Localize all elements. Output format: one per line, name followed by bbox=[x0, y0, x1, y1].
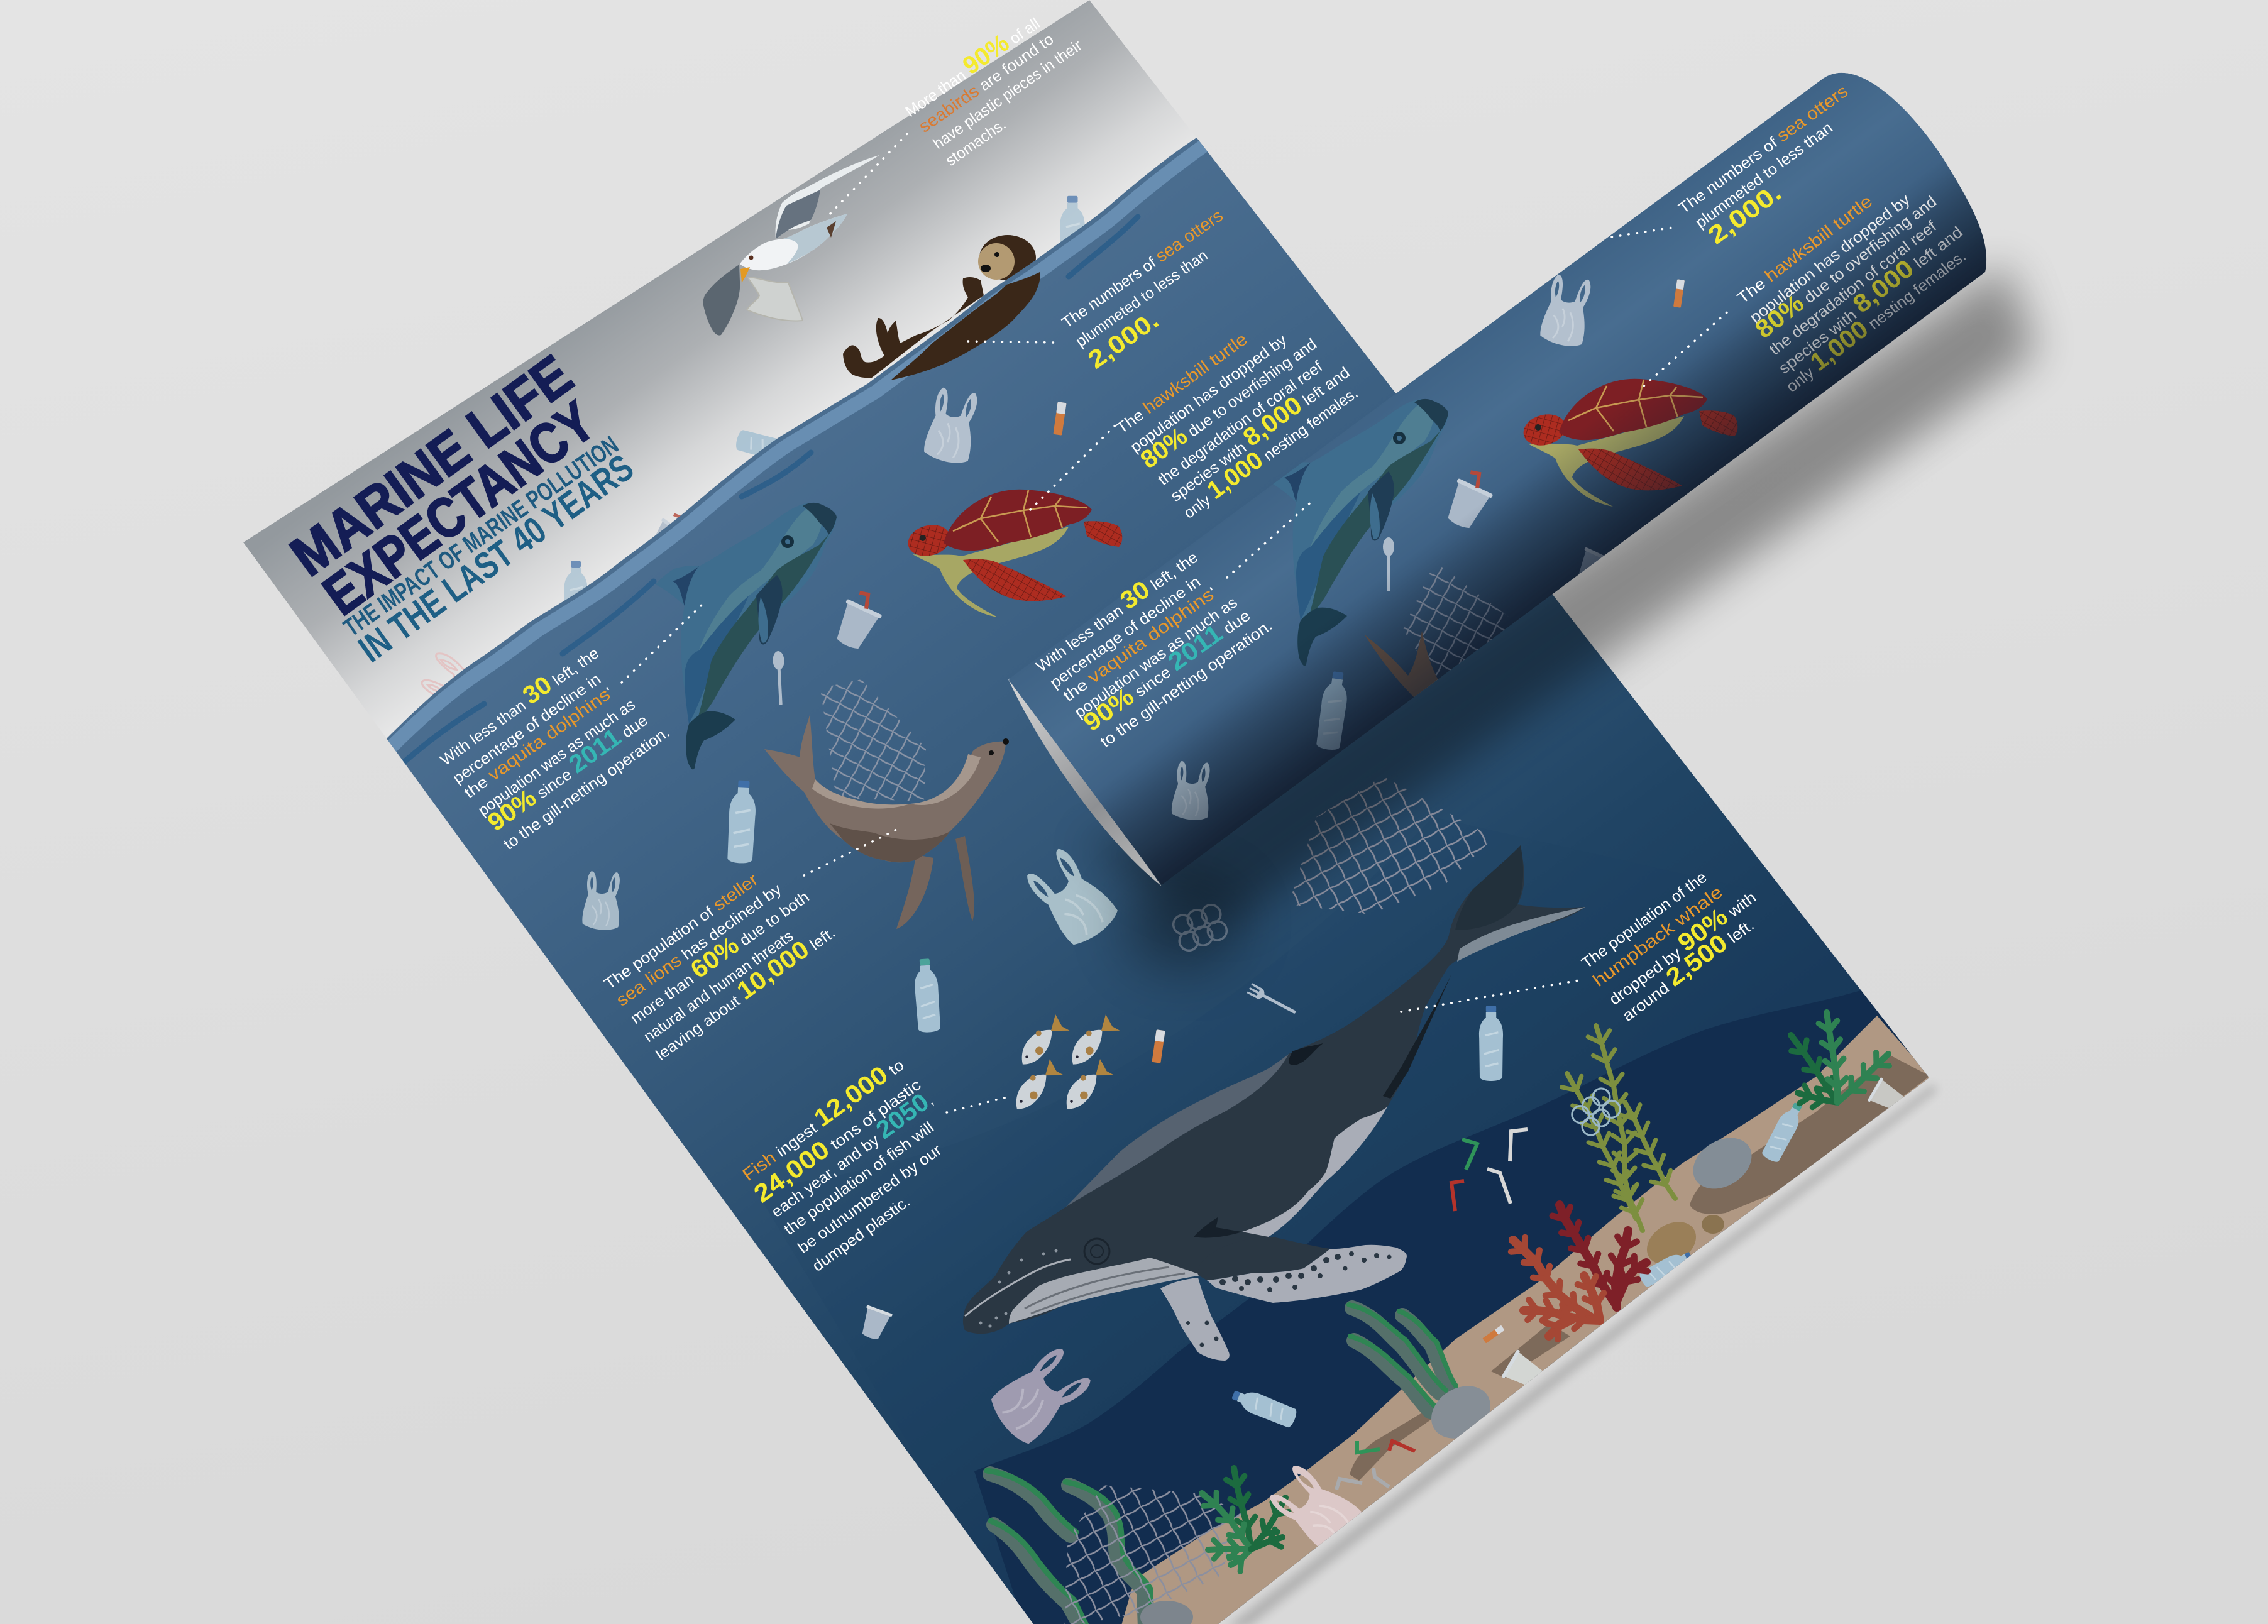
roll vaquita caption: the vaquita dolphins ' bbox=[1059, 583, 1220, 705]
hawksbill caption: The hawksbill turtle bbox=[1112, 329, 1251, 437]
hawksbill caption: species with 8,000 left and bbox=[1162, 357, 1354, 507]
seabirds caption: have plastic pieces in their bbox=[930, 36, 1085, 153]
fish caption: dumped plastic. bbox=[809, 1192, 913, 1275]
icon: bottle bbox=[1479, 1006, 1503, 1081]
title line 2: EXPECTANCY bbox=[312, 390, 606, 627]
icon: crushed bottle bbox=[1230, 1385, 1299, 1429]
vaquita caption: 90% since 2011 due bbox=[483, 705, 652, 837]
vaquita caption: With less than 30 left, the bbox=[432, 638, 603, 771]
icon: bottle at surface bbox=[564, 561, 587, 601]
roll vaquita caption: to the gill-netting operation. bbox=[1097, 617, 1275, 751]
seabird bbox=[703, 155, 879, 336]
roll turtle bbox=[1520, 379, 1737, 507]
icon: bag at surface left bbox=[417, 647, 504, 724]
roll bottle bbox=[1315, 671, 1351, 751]
steller sea lions caption bbox=[600, 870, 840, 1065]
roll hawksbill caption: 80% due to overfishing and bbox=[1750, 186, 1941, 344]
roll vaquita caption bbox=[1028, 542, 1275, 751]
pectoral fin bbox=[1198, 1237, 1330, 1280]
icon: fork bbox=[1247, 983, 1298, 1018]
steller sea lions caption: leaving about 10,000 left. bbox=[648, 917, 840, 1065]
icon: pink bag on seaweed bbox=[1264, 1459, 1367, 1558]
seabed cup bbox=[1867, 1077, 1907, 1116]
steller sea lions caption: natural and human threats bbox=[641, 927, 796, 1046]
sand shadows bbox=[1350, 1054, 1930, 1481]
seabirds caption: stomachs. bbox=[942, 116, 1010, 170]
seaweed: green bush bbox=[1202, 1468, 1285, 1565]
icon: bottle with teal cap bbox=[913, 958, 941, 1033]
sea otters caption: 2,000. bbox=[1083, 306, 1164, 374]
steller sea lions caption: more than 60% due to both bbox=[623, 881, 813, 1029]
steller sea lions caption: The population of steller bbox=[600, 870, 762, 993]
icon: cigarette butt bbox=[1053, 402, 1067, 436]
hawksbill caption: only 1,000 nesting females. bbox=[1175, 378, 1362, 524]
vaquita caption: population was as much as bbox=[475, 696, 639, 820]
seabirds caption: seabirds are found to bbox=[915, 29, 1057, 136]
second fin bbox=[1160, 1278, 1230, 1361]
roll cup lower bbox=[1571, 547, 1614, 592]
icon: bag at surface right bbox=[1125, 168, 1201, 230]
roll sea otters caption: plummeted to less than bbox=[1692, 119, 1836, 232]
roll cup bbox=[1440, 466, 1499, 533]
roll inner flap bbox=[1008, 679, 1162, 886]
roll hawksbill caption: The hawksbill turtle bbox=[1733, 191, 1876, 307]
sea otter upper body bbox=[843, 235, 1036, 378]
deepest water band bbox=[974, 990, 1949, 1624]
icon: plastic bag bbox=[922, 385, 983, 466]
whale belly patch bbox=[1242, 1107, 1387, 1237]
vaquita caption: the vaquita dolphins ' bbox=[460, 683, 617, 802]
fish caption: be outnumbered by our bbox=[795, 1141, 945, 1257]
poster bottom-edge shadow bbox=[1226, 1084, 1937, 1624]
panel: poster sheet bbox=[243, 0, 1949, 1624]
roll dolphin bbox=[1267, 399, 1448, 666]
fish caption bbox=[735, 1050, 945, 1275]
roll vaquita caption: percentage of decline in bbox=[1047, 573, 1204, 692]
rock brown bbox=[1639, 1213, 1704, 1273]
roll hawksbill caption: population has dropped by bbox=[1746, 190, 1913, 327]
seabed cigarette bbox=[1482, 1325, 1505, 1343]
roll leader lines bbox=[1227, 228, 1731, 578]
sea floor sand bbox=[1119, 1016, 1933, 1624]
icon: seabed bottle bbox=[1760, 1100, 1807, 1164]
icon: plastic bag bbox=[1020, 843, 1122, 951]
roll sea otters caption: 2,000. bbox=[1703, 178, 1786, 250]
vaquita dolphin bbox=[656, 503, 837, 769]
roll spoon bbox=[1383, 537, 1394, 591]
whale throat pleats bbox=[1009, 1258, 1203, 1324]
subtitle line 2: IN THE LAST 40 YEARS bbox=[351, 446, 641, 671]
roll hawksbill caption: only 1,000 nesting females. bbox=[1778, 241, 1971, 397]
sky gradient bbox=[243, 0, 1176, 738]
vaquita caption: to the gill-netting operation. bbox=[500, 723, 673, 853]
seabed crushed bottle bbox=[1638, 1248, 1695, 1289]
humpback caption bbox=[1578, 869, 1761, 1026]
hawksbill caption bbox=[1112, 329, 1362, 524]
seaweed: green plant right bbox=[1791, 1012, 1888, 1102]
seabirds caption bbox=[898, 8, 1085, 170]
hawksbill caption: the degradation of coral reef bbox=[1155, 358, 1326, 489]
humpback caption: around 2,500 left. bbox=[1614, 909, 1759, 1026]
panel: rolled poster bbox=[973, 73, 1986, 885]
seabed cup bbox=[1501, 1349, 1548, 1395]
rock grey bbox=[1421, 1375, 1500, 1449]
humpback caption: humpback whale bbox=[1589, 882, 1726, 990]
vaquita caption: percentage of decline in bbox=[449, 670, 604, 787]
roll sea lion flipper bbox=[1365, 631, 1446, 698]
steller sea lions caption: sea lions has declined by bbox=[612, 879, 785, 1010]
fish caption: the population of fish will bbox=[781, 1119, 937, 1239]
icon: six-pack rings bbox=[1170, 902, 1230, 953]
icon: plastic bag bbox=[581, 870, 623, 931]
subtitle line 1: THE IMPACT OF MARINE POLLUTION bbox=[339, 431, 624, 642]
roll cup left bbox=[973, 657, 1016, 703]
roll sea otters caption: The numbers of sea otters bbox=[1674, 81, 1851, 217]
seabirds caption: More than 90% of all bbox=[898, 8, 1044, 122]
hawksbill caption: 80% due to overfishing and bbox=[1135, 329, 1321, 474]
icon: cigarette butt bbox=[1152, 1029, 1165, 1063]
icon: cup at surface bbox=[642, 509, 695, 565]
roll vaquita caption: 90% since 2011 due bbox=[1079, 600, 1255, 737]
roll vaquita caption: population was as much as bbox=[1071, 593, 1241, 721]
hawksbill caption: population has dropped by bbox=[1127, 331, 1291, 456]
rock bottom bbox=[1140, 1601, 1193, 1624]
six-pack rings on kelp bbox=[1568, 1085, 1624, 1139]
sea lion bbox=[764, 715, 1009, 929]
net bbox=[1289, 776, 1494, 914]
seaweed: olive kelp bbox=[1567, 1026, 1675, 1231]
icon: crumpled bottle bbox=[727, 780, 757, 864]
icon: straws bbox=[1336, 1129, 1528, 1490]
net behind sea lion bbox=[820, 679, 926, 801]
wave crest bbox=[387, 146, 1204, 764]
roll net bbox=[1403, 562, 1519, 698]
humpback caption: dropped by 90% with bbox=[1601, 882, 1761, 1010]
rock bbox=[1684, 1127, 1761, 1199]
roll cylinder shading bbox=[1008, 73, 1986, 885]
sea otters caption: The numbers of sea otters bbox=[1058, 206, 1226, 332]
fold tip shadow bbox=[1125, 880, 1238, 968]
vaquita caption bbox=[432, 638, 673, 853]
roll bottle tilted bbox=[1499, 634, 1566, 683]
roll plastic bag bbox=[1538, 272, 1595, 349]
icon: bottle at surface bbox=[1060, 196, 1085, 243]
humpback caption: The population of the bbox=[1578, 869, 1710, 972]
title block bbox=[280, 344, 641, 671]
icon: bottle at surface bbox=[734, 429, 806, 468]
coral: dark red bbox=[1560, 1205, 1646, 1307]
icon: plastic bag carried by bird bbox=[747, 278, 803, 321]
roll vaquita caption: With less than 30 left, the bbox=[1028, 542, 1203, 677]
roll plastic bag lower bbox=[1170, 760, 1213, 821]
leader lines on poster bbox=[622, 134, 1578, 1112]
seaweed: green blades bbox=[1349, 1305, 1456, 1412]
roll hawksbill caption bbox=[1733, 186, 1971, 397]
seaweed: bottom left kelp bbox=[987, 1471, 1152, 1624]
water bbox=[377, 135, 1949, 1624]
icon: purple plastic bag bbox=[985, 1342, 1096, 1449]
roll hawksbill caption: the degradation of coral reef bbox=[1766, 217, 1940, 359]
roll hawksbill caption: species with 8,000 left and bbox=[1770, 217, 1968, 379]
fish caption: Fish ingest 12,000 to bbox=[735, 1050, 908, 1186]
icon: spoon bbox=[773, 651, 786, 705]
fish caption: each year, and by 2050, bbox=[763, 1085, 938, 1222]
hawksbill turtle bbox=[905, 490, 1122, 617]
roll cigarette bbox=[1673, 279, 1685, 308]
humpback whale bbox=[963, 845, 1585, 1361]
sea otter lower body bbox=[891, 272, 1040, 380]
coral: rust bbox=[1513, 1240, 1600, 1336]
roll shadow bbox=[1081, 264, 2037, 924]
fish caption: 24,000 tons of plastic bbox=[749, 1070, 925, 1208]
sea otters caption: plummeted to less than bbox=[1072, 246, 1211, 351]
net on seabed bbox=[1064, 1485, 1247, 1624]
deep water band bbox=[754, 817, 1949, 1624]
fish school bbox=[1005, 1014, 1122, 1113]
title line 1: MARINE LIFE bbox=[280, 344, 583, 588]
small rock bbox=[1702, 1215, 1724, 1234]
icon: cup bbox=[829, 587, 888, 654]
icon: cup bbox=[857, 1305, 893, 1342]
